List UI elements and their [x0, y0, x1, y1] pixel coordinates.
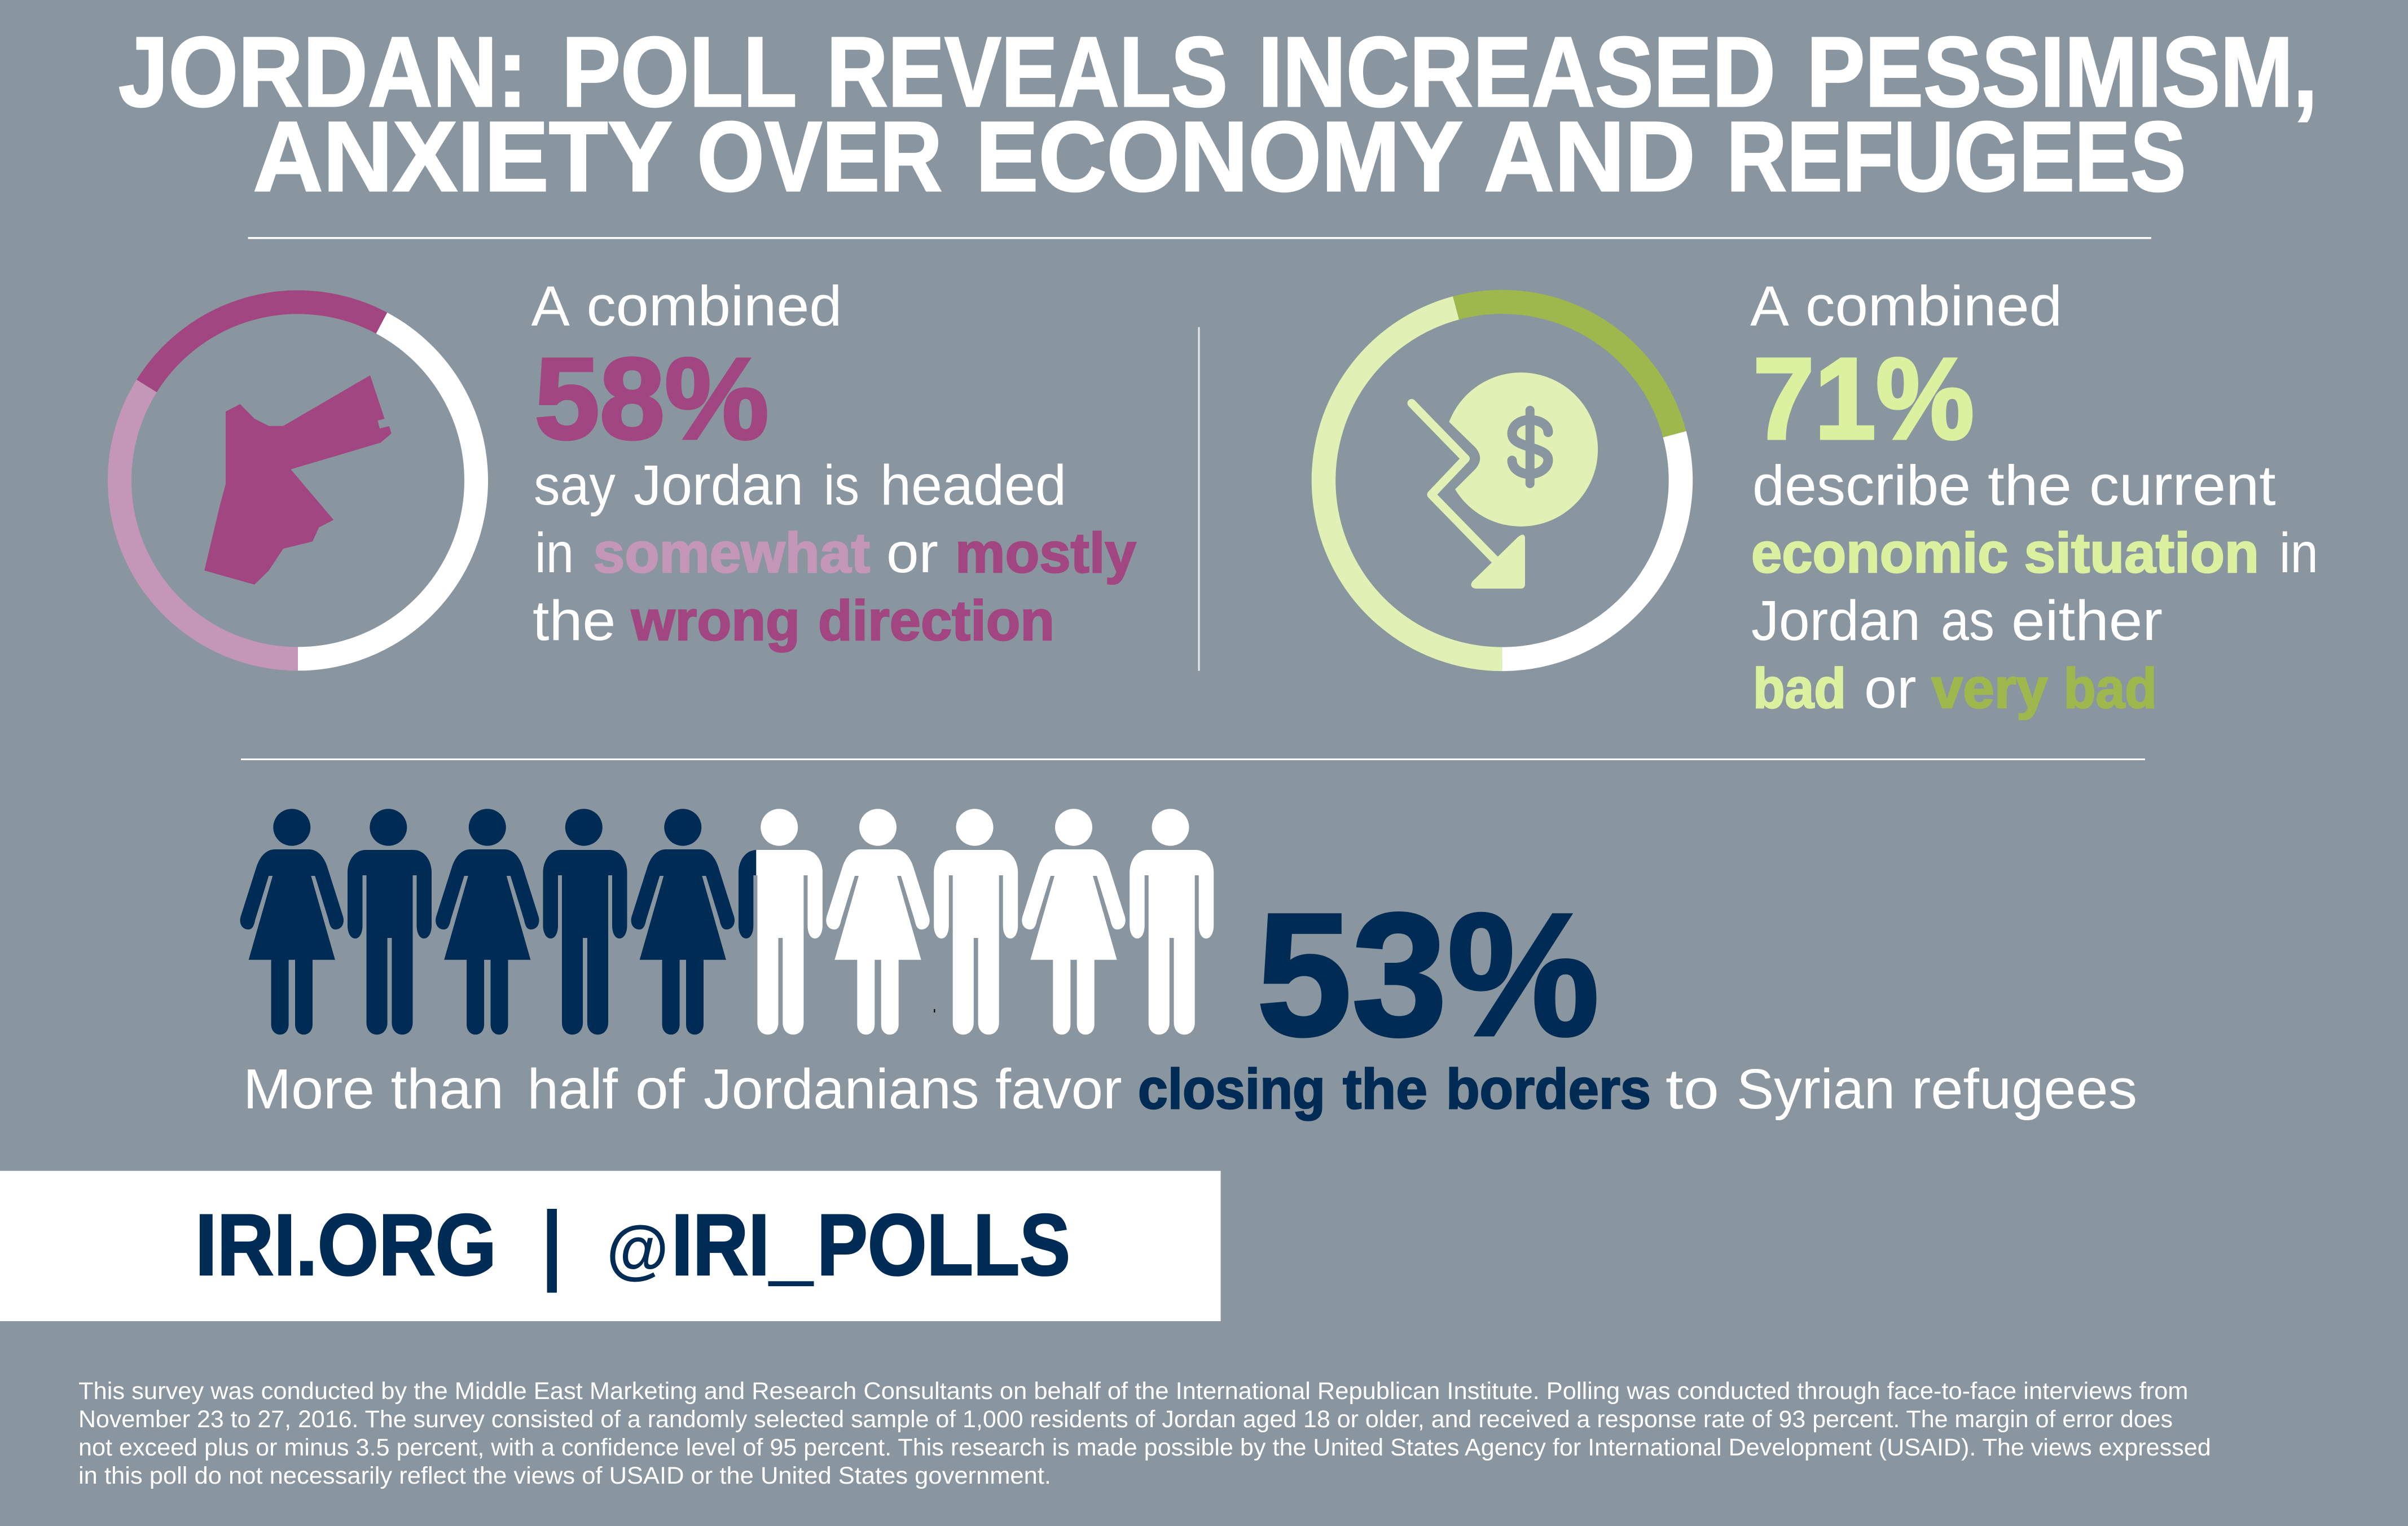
text: wrong direction statement: direction — [818, 589, 1054, 652]
banner: website and handle — [0, 1171, 1221, 1321]
text: a combined: combined — [587, 274, 842, 337]
person: woman 2 — [436, 809, 539, 1034]
text: closing the borders caption: Syrian — [1737, 1058, 1895, 1121]
icon: falling dollar — [1412, 372, 1598, 589]
text: economic situation statement: situation — [2024, 521, 2259, 585]
text block: methodology footnote: not exceed plus or minus 3.5 percent, with a confidence level of 95 percent. This research is made possible by the United States Agency for International Development (USAID). The views expressed — [78, 1434, 2211, 1461]
text: wrong direction statement: somewhat — [594, 521, 870, 585]
text: closing the borders caption: Jordanians — [704, 1058, 979, 1121]
text: economic situation statement: current — [2089, 454, 2276, 517]
text: wrong direction statement: headed — [880, 454, 1066, 517]
text: a combined: A — [1750, 274, 1789, 337]
title — [118, 17, 2318, 212]
text: closing the borders caption: borders — [1446, 1058, 1651, 1121]
title: INCREASED — [1258, 17, 1776, 128]
text: website: IRI.ORG — [195, 1196, 496, 1293]
panel: 71 percent economy — [1324, 274, 2318, 720]
text: a combined: A — [531, 274, 570, 337]
text: closing the borders caption: refugees — [1912, 1058, 2137, 1121]
text: economic situation statement: either — [2011, 589, 2163, 652]
title: REFUGEES — [1726, 102, 2186, 212]
pictogram: ten people, 53 percent shaded — [240, 809, 1214, 1034]
text: closing the borders caption: half — [528, 1058, 618, 1121]
person: man 2 — [543, 809, 627, 1034]
person: man 1 — [348, 809, 432, 1034]
title: AND — [1484, 102, 1695, 212]
text: closing the borders caption: favor — [995, 1058, 1122, 1121]
text: wrong direction statement: say — [534, 454, 616, 517]
title: OVER — [697, 102, 942, 212]
text: social handle — [607, 1196, 1070, 1293]
panel: 53 percent closing borders — [240, 809, 2137, 1121]
stat: 58 percent: 58% — [535, 334, 768, 463]
text: wrong direction statement: the — [533, 589, 616, 652]
text: wrong direction statement: or — [886, 521, 938, 585]
text: closing the borders caption: the — [1343, 1058, 1427, 1121]
text: wrong direction statement: mostly — [955, 521, 1136, 585]
panel: 58 percent wrong direction — [120, 274, 1136, 659]
person: man 5 — [1130, 809, 1214, 1034]
text: closing the borders caption: More — [243, 1058, 375, 1121]
text: closing the borders caption: to — [1666, 1058, 1719, 1121]
text: economic situation statement — [1751, 454, 2318, 720]
text block: methodology footnote — [78, 1378, 2211, 1489]
text: social handle: POLLS — [817, 1196, 1070, 1293]
text: a combined: combined — [1805, 274, 2062, 337]
text: economic situation statement: in — [2279, 521, 2318, 585]
title: PESSIMISM, — [1807, 17, 2318, 128]
title: REVEALS — [827, 17, 1228, 128]
text block: methodology footnote: This survey was conducted by the Middle East Marketing and Research Consultants on behalf of the International Republican Institute. Polling was conducted through face-to-face interviews from — [78, 1378, 2188, 1405]
text: closing the borders caption — [243, 1058, 2137, 1121]
text block: methodology footnote: November 23 to 27, 2016. The survey consisted of a randomly selected sample of 1,000 residents of Jordan aged 18 or older, and received a response rate of 93 percent. The margin of error does — [78, 1406, 2173, 1433]
text: social handle: @ — [607, 1212, 669, 1286]
person: man 3, partly shaded — [739, 809, 823, 1034]
text: closing the borders caption: closing — [1138, 1058, 1325, 1121]
person: woman 1 — [240, 809, 344, 1034]
text: economic situation statement: bad — [2064, 657, 2157, 720]
person: woman 4 — [826, 809, 930, 1034]
text: economic situation statement: describe — [1752, 454, 1971, 517]
icon: map of Jordan — [204, 375, 392, 585]
text: economic situation statement: economic — [1751, 521, 2009, 585]
text: wrong direction statement: in — [535, 521, 574, 585]
person: man 4 — [934, 809, 1018, 1034]
person: woman 5 — [1022, 809, 1126, 1034]
text: social handle: IRI_ — [671, 1196, 813, 1293]
text: economic situation statement: or — [1864, 657, 1917, 720]
title: ANXIETY — [253, 102, 673, 212]
text: wrong direction statement: Jordan — [634, 454, 803, 517]
text: wrong direction statement: wrong — [631, 589, 800, 652]
donut chart: direction of the country — [120, 302, 476, 659]
text: wrong direction statement: is — [824, 454, 859, 517]
donut chart: economic situation — [1324, 302, 1681, 659]
stat: 53 percent: 53% — [1256, 876, 1600, 1072]
stat: 71 percent: 71% — [1753, 334, 1974, 463]
text: closing the borders caption: than — [391, 1058, 504, 1121]
text: economic situation statement: bad — [1753, 657, 1846, 720]
text: economic situation statement: as — [1941, 589, 1994, 652]
text block: methodology footnote: in this poll do not necessarily reflect the views of USAID or the United States government. — [78, 1462, 1051, 1489]
text: economic situation statement: very — [1931, 657, 2048, 720]
text: wrong direction statement — [533, 454, 1136, 652]
text: economic situation statement: Jordan — [1751, 589, 1921, 652]
text: closing the borders caption: of — [635, 1058, 685, 1121]
text: economic situation statement: the — [1988, 454, 2072, 517]
title: JORDAN: — [118, 17, 527, 128]
title: ECONOMY — [975, 102, 1463, 212]
title: POLL — [562, 17, 797, 128]
person: woman 3 — [631, 809, 735, 1034]
